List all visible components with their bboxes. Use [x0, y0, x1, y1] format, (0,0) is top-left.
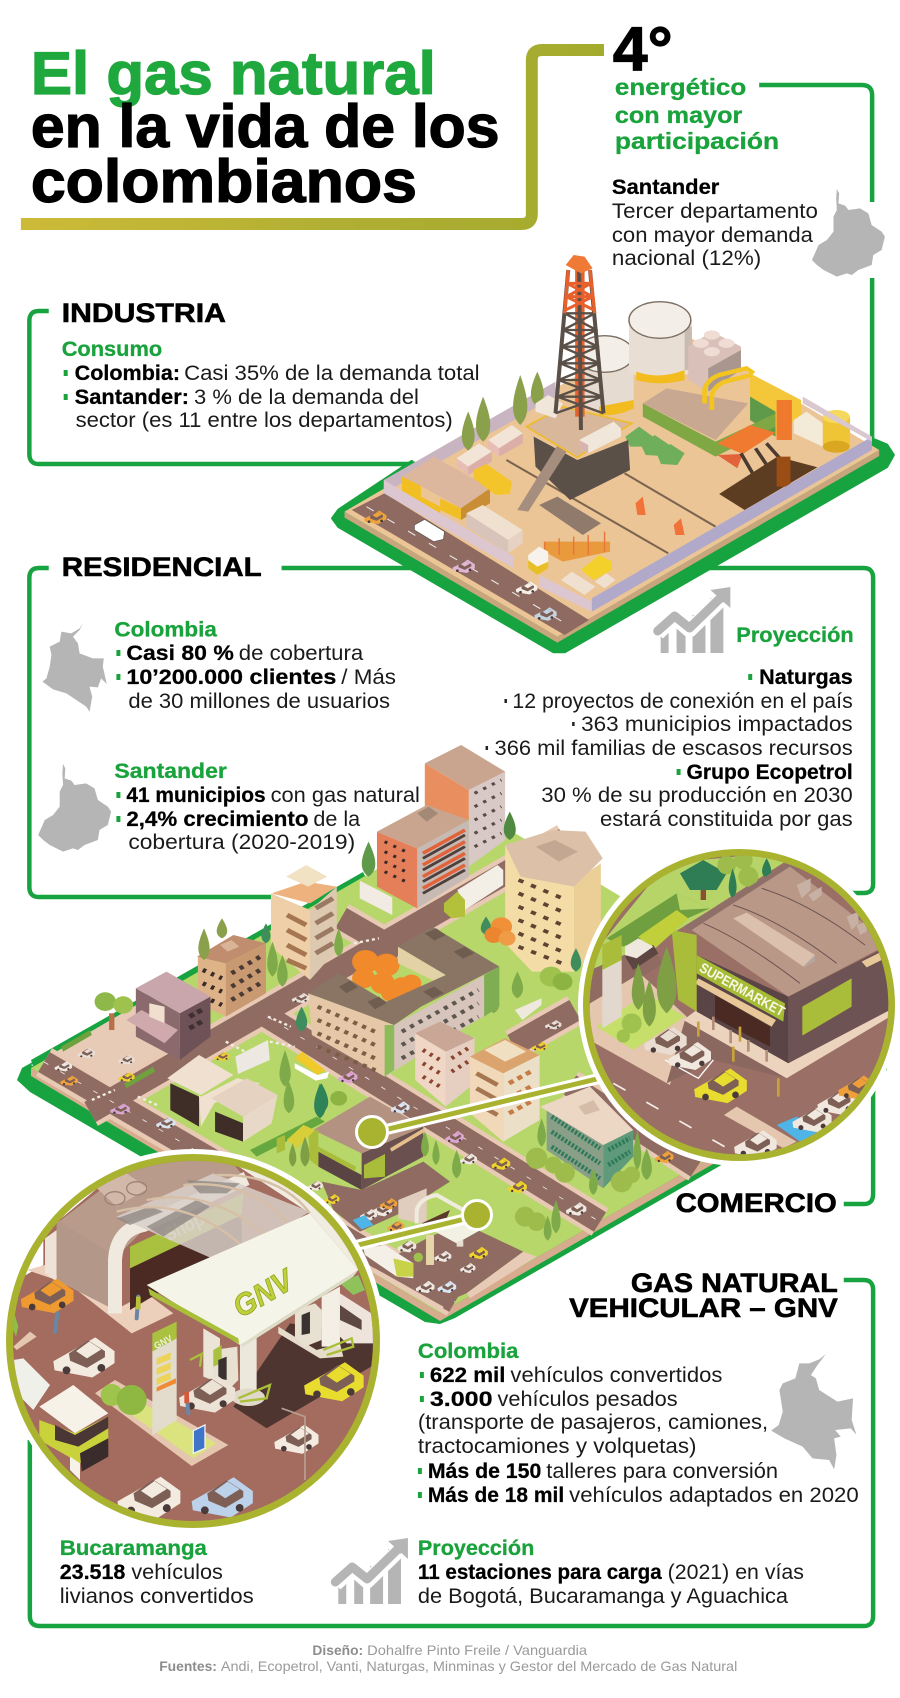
- city base: [17, 811, 887, 1324]
- frame: industria: [29, 311, 418, 464]
- U shaped apartment block: [296, 927, 499, 1077]
- text: gnv Colombia: Colombia: [418, 1339, 519, 1363]
- icon: Colombia map large: [771, 1354, 856, 1469]
- frame: residencial: [29, 568, 873, 897]
- text: gnv Colombia: (transporte de pasajeros, camiones,: [418, 1410, 768, 1434]
- derrick tower: [555, 255, 604, 430]
- processing units: [625, 330, 850, 510]
- icon: Santander map: [38, 764, 111, 852]
- shadow and pumps rear: [233, 1323, 377, 1428]
- supermarket building: [685, 863, 890, 1063]
- signs: [602, 910, 697, 1028]
- credits: [159, 1643, 737, 1674]
- island and totem: [95, 1322, 228, 1466]
- office and gas station small: [280, 1050, 673, 1293]
- text: industria consumo: Casi 35% de la demanda total: [184, 361, 480, 385]
- residential buildings: [55, 745, 603, 1142]
- small cars on left streets: [55, 993, 561, 1129]
- text: residencial proyeccion: [486, 623, 854, 831]
- text: gnv Colombia: 622 mil: [430, 1363, 505, 1387]
- derrick substructure: [517, 395, 632, 512]
- text: residencial Colombia: de 30 millones de usuarios: [128, 689, 390, 713]
- road marks: [613, 1082, 725, 1148]
- title: El gas natural: [31, 40, 436, 107]
- text: Santander demand: con mayor demanda: [612, 223, 813, 247]
- text: residencial proyeccion: 12 proyectos de conexión en el país: [512, 689, 853, 713]
- icon: growth chart: [658, 587, 730, 653]
- canopy columns: [190, 1287, 353, 1406]
- green truck and billboard: [360, 812, 516, 918]
- circle: gas station: [0, 1149, 390, 1533]
- text: residencial Santander: Santander: [114, 759, 228, 783]
- callout: gas station connector: [350, 1200, 492, 1247]
- supermarket small: [250, 1097, 425, 1190]
- text: gnv Colombia: Más de 150: [428, 1459, 541, 1483]
- shop: Shop: [161, 1209, 208, 1246]
- text: Bucaramanga: livianos convertidos: [60, 1584, 254, 1608]
- heading: comercio: COMERCIO: [676, 1188, 837, 1218]
- orange apartment tower: [377, 745, 505, 908]
- illustration: oil and gas industrial site: [333, 255, 893, 652]
- heading: energy participation: [615, 74, 779, 154]
- text: gnv proyeccion: de Bogotá, Bucaramanga y Aguachica: [418, 1584, 788, 1608]
- text: gnv Colombia: vehículos pesados: [497, 1387, 678, 1411]
- text: residencial Santander: de la: [313, 807, 360, 831]
- callout: supermarket connector: [356, 1077, 605, 1148]
- text: Bucaramanga: [60, 1536, 254, 1608]
- icon: Colombia map: [42, 623, 107, 712]
- text: Santander demand: Santander: [612, 175, 720, 199]
- heading: residencial: RESIDENCIAL: [62, 552, 262, 582]
- text: residencial proyeccion: 366 mil familias de escasos recursos: [495, 736, 853, 760]
- text: gnv Colombia: tractocamiones y volquetas): [418, 1434, 696, 1458]
- text: gnv Colombia: vehículos convertidos: [510, 1363, 722, 1387]
- heading: gnv: GAS NATURAL: [631, 1268, 838, 1298]
- icon: growth chart lower: [335, 1538, 408, 1604]
- text: residencial Santander: 41 municipios: [126, 783, 266, 807]
- text: gnv proyeccion: 11 estaciones para carga: [418, 1560, 663, 1584]
- text: residencial Santander: [114, 759, 420, 854]
- text: industria consumo: 3 % de la demanda del: [194, 385, 419, 409]
- circle: supermarket: [578, 849, 895, 1165]
- vehicles: [364, 497, 685, 621]
- cream apartment tower: [505, 830, 603, 972]
- text: Santander demand: Tercer departamento: [612, 199, 818, 223]
- title: en la vida de los: [31, 93, 499, 160]
- trees upper: [481, 917, 581, 1020]
- canopy: [147, 1213, 358, 1347]
- text: gnv Colombia: 3.000: [430, 1387, 493, 1411]
- heading: industria: INDUSTRIA: [62, 298, 226, 328]
- text: gnv proyeccion: (2021) en vías: [668, 1560, 804, 1584]
- text: Bucaramanga: vehículos: [131, 1560, 223, 1584]
- purple house: [61, 972, 210, 1088]
- text: residencial proyeccion: 30 % de su producción en 2030: [541, 783, 853, 807]
- frame: comercio: [844, 1090, 873, 1204]
- text: residencial Santander: cobertura (2020-2019): [128, 830, 355, 854]
- text: residencial proyeccion: estará constituida por gas: [600, 807, 853, 831]
- text: residencial Colombia: [114, 617, 396, 713]
- supermarket building: SUPERMARKET: [697, 959, 788, 1020]
- cars: [644, 1027, 876, 1158]
- trees: [462, 372, 544, 451]
- people and lamp: [55, 1297, 305, 1480]
- text: residencial Colombia: Casi 80 %: [126, 641, 234, 665]
- canopy: GNV: [227, 1262, 301, 1324]
- credits: Fuentes:: [159, 1659, 217, 1674]
- heading: energy participation: con mayor: [615, 102, 742, 128]
- credits: Dohalfre Pinto Freile / Vanguardia: [367, 1643, 588, 1658]
- beige tower: [267, 865, 343, 987]
- tan block: [197, 918, 270, 1017]
- text: residencial Colombia: / Más: [341, 665, 396, 689]
- island and totem: GNV: [152, 1333, 175, 1351]
- text: residencial Colombia: 10’200.000 clientes: [126, 665, 336, 689]
- heading: energy participation: energético: [615, 74, 746, 100]
- text: residencial Santander: con gas natural: [271, 783, 420, 807]
- heading: gnv: [569, 1268, 838, 1323]
- heading: gnv: VEHICULAR – GNV: [569, 1293, 838, 1323]
- text: gnv proyeccion: Proyección: [418, 1536, 534, 1560]
- vehicles: [13, 1279, 364, 1518]
- illustration: city block: [17, 745, 887, 1324]
- text: Bucaramanga: Bucaramanga: [60, 1536, 208, 1560]
- text: residencial Colombia: de cobertura: [239, 641, 363, 665]
- text: gnv Colombia: vehículos adaptados en 2020: [569, 1483, 859, 1507]
- cabins and shelters: [402, 425, 601, 553]
- crosswalks: [92, 938, 379, 1105]
- text: industria consumo: Colombia:: [75, 361, 180, 385]
- text: Santander demand: [612, 175, 818, 270]
- mid buildings: [415, 1022, 475, 1107]
- storage tanks: [575, 302, 692, 415]
- text: Bucaramanga: 23.518: [60, 1560, 125, 1584]
- text: industria consumo: Santander:: [75, 385, 189, 409]
- text: gnv Colombia: talleres para conversión: [546, 1459, 778, 1483]
- text: residencial proyeccion: 363 municipios impactados: [581, 712, 853, 736]
- credits: Diseño:: [312, 1643, 363, 1658]
- icon: Santander map top: [812, 189, 885, 277]
- text: industria consumo: Consumo: [62, 337, 162, 361]
- text: Santander demand: nacional (12%): [612, 246, 761, 270]
- text: residencial proyeccion: Grupo Ecopetrol: [687, 760, 853, 784]
- title: colombianos: [31, 148, 417, 215]
- text: gnv Colombia: [418, 1339, 859, 1507]
- shop: [43, 1160, 310, 1313]
- text: residencial Santander: 2,4% crecimiento: [126, 807, 308, 831]
- text: residencial Colombia: Colombia: [114, 617, 218, 642]
- front fences: [384, 397, 872, 612]
- title bracket: [21, 50, 604, 224]
- heading: energy participation: participación: [615, 128, 779, 154]
- text: residencial proyeccion: Proyección: [736, 623, 854, 647]
- low offices: [167, 1040, 347, 1142]
- credits: Andi, Ecopetrol, Vanti, Naturgas, Minminas y Gestor del Mercado de Gas Natural: [221, 1659, 737, 1674]
- text: gnv Colombia: Más de 18 mil: [428, 1483, 564, 1507]
- text: residencial proyeccion: Naturgas: [759, 665, 853, 689]
- text: industria consumo: [62, 337, 480, 432]
- stat: 4 degrees: 4°: [613, 15, 673, 84]
- frame: fourth energy source: [759, 85, 872, 450]
- text: gnv proyeccion: [418, 1536, 804, 1608]
- frame: gnv: [30, 1280, 873, 1626]
- title: [31, 40, 499, 215]
- text: industria consumo: sector (es 11 entre los departamentos): [76, 408, 453, 432]
